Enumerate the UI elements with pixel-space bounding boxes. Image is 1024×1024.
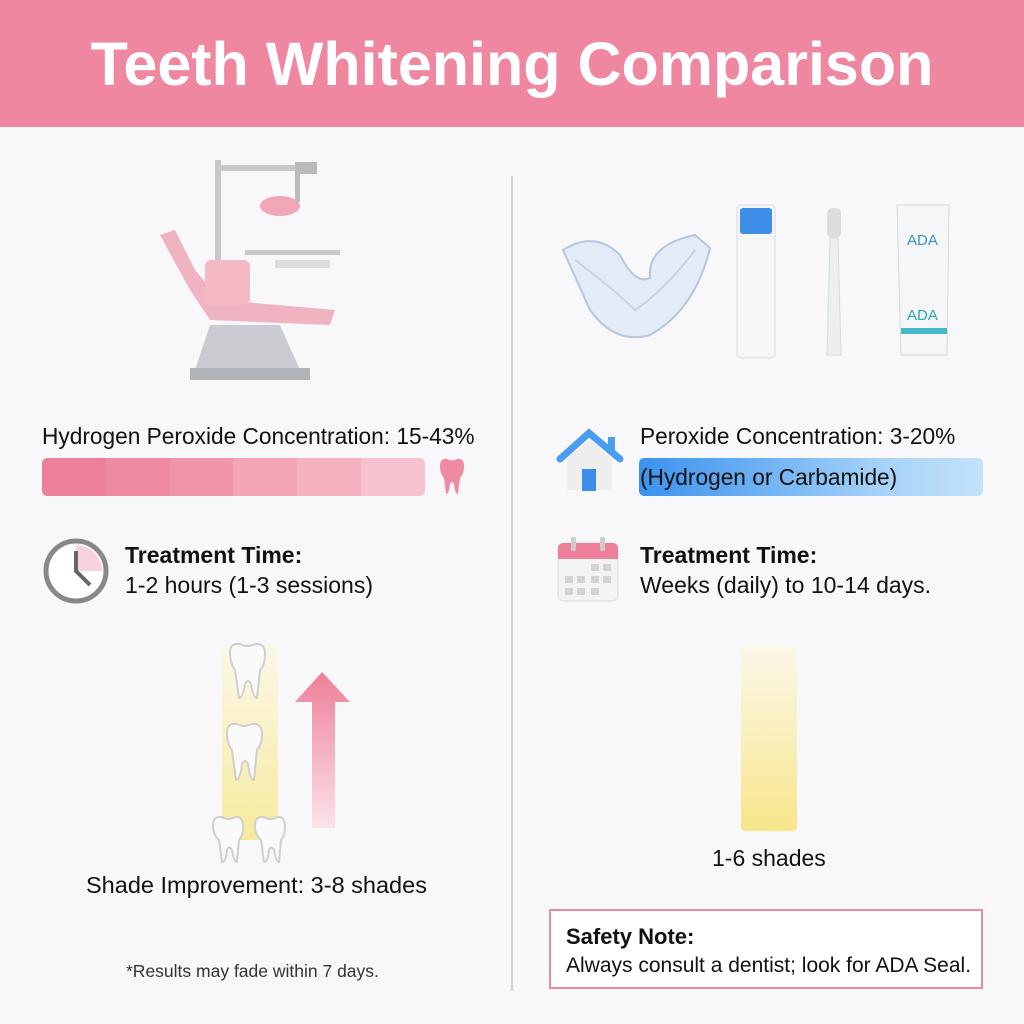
- icon: calendar: [558, 537, 618, 602]
- left concentration label: Hydrogen Peroxide Concentration: 15-43%: [42, 423, 475, 449]
- right concentration label: Peroxide Concentration: 3-20%: [640, 423, 955, 449]
- right treatment time: Weeks (daily) to 10-14 days.: [640, 572, 931, 598]
- right concentration bar: (Hydrogen or Carbamide): [640, 464, 897, 490]
- left treatment time: [125, 542, 373, 598]
- icon: pink tooth: [440, 458, 464, 494]
- left concentration bar: [42, 458, 425, 496]
- left shade chart with teeth and arrow: [212, 642, 350, 863]
- left shade label: Shade Improvement: 3-8 shades: [86, 872, 427, 898]
- left treatment time: 1-2 hours (1-3 sessions): [125, 572, 373, 598]
- right treatment time: Treatment Time:: [640, 542, 817, 568]
- illustration: dental chair: [160, 160, 340, 380]
- icon: house: [556, 428, 624, 491]
- products: tray, strip, toothbrush, tube: ADA: [907, 307, 938, 324]
- safety note callout: Always consult a dentist; look for ADA Seal.: [566, 954, 971, 977]
- right shade bar: [741, 645, 797, 831]
- right treatment time: [640, 542, 931, 598]
- right shade label: 1-6 shades: [712, 845, 826, 871]
- right concentration bar: [639, 458, 983, 496]
- title: Teeth Whitening Comparison: [91, 30, 933, 98]
- header banner: [0, 0, 1024, 127]
- icon: clock: [44, 538, 108, 604]
- safety note callout: Safety Note:: [566, 924, 694, 949]
- left treatment time: Treatment Time:: [125, 542, 302, 568]
- products: tray, strip, toothbrush, tube: ADA: [907, 232, 938, 249]
- footnote: *Results may fade within 7 days.: [126, 961, 379, 981]
- safety note callout: [549, 909, 983, 989]
- products: tray, strip, toothbrush, tube: [562, 204, 950, 358]
